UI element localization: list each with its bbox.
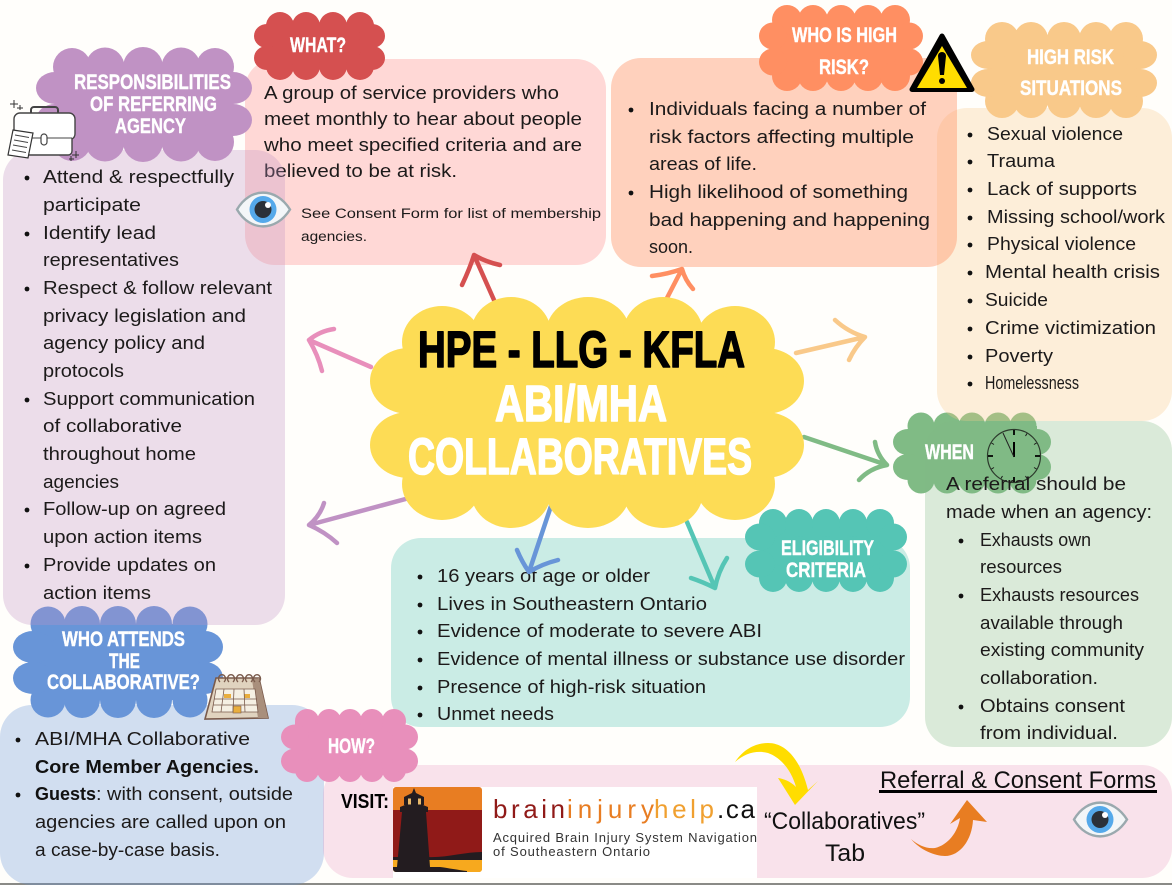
responsibilities list: protocols [43,360,124,381]
who is high risk panel background [611,58,957,267]
high risk situations list: Sexual violence [987,123,1123,144]
who is high risk list: bad happening and happening [649,209,930,230]
eligibility list [418,565,905,724]
high risk situations list [968,123,1166,393]
collaboratives tab label [764,808,925,867]
icon: eye near what panel [237,193,290,226]
when text: existing community [980,639,1145,660]
responsibilities list: action items [43,582,151,603]
heading text: who is high risk [792,24,897,79]
what description: A group of service providers who [264,82,559,103]
responsibilities list: Provide updates on [43,554,216,575]
heading text: eligibility criteria: ELIGIBILITY [781,537,874,560]
high risk situations list: Missing school/work [987,206,1166,227]
consent form note: agencies. [301,229,367,244]
when text: Exhausts resources [980,584,1139,605]
arrow: what [462,255,500,300]
heading text: who attends the collaborative [47,628,200,694]
collaboratives tab label: “Collaboratives” [764,808,925,835]
when panel background [925,421,1172,747]
panel: high risk situations [937,22,1172,421]
who is high risk list: areas of life. [649,153,757,174]
when text: from individual. [980,722,1118,743]
high risk situations list: Suicide [985,289,1048,310]
brain injury help logo: .ca [717,794,756,824]
orange curved arrow [911,800,987,856]
heading text: responsibilities [74,71,231,138]
eligibility list: Lives in Southeastern Ontario [437,593,707,614]
heading text: who attends the collaborative: THE [109,650,140,673]
heading text: who attends the collaborative: COLLABORATIVE? [47,671,200,694]
who attends bullet text: agencies are called upon on [35,811,286,832]
heading cloud: when [893,412,1051,494]
heading text: what: WHAT? [290,34,346,57]
who is high risk list: risk factors affecting multiple [649,126,914,147]
who attends bullet text: a case-by-case basis. [35,839,220,860]
responsibilities list: participate [43,194,141,215]
arrow: high risk situations [796,320,865,360]
icon: warning triangle [912,36,972,90]
brain injury help logo: Acquired Brain Injury System Navigation [493,830,757,845]
eligibility list: Evidence of mental illness or substance use disorder [437,648,905,669]
who is high risk list [629,98,930,257]
eligibility list: Unmet needs [437,703,554,724]
heading text: high risk situations: SITUATIONS [1020,77,1122,100]
referral and consent forms link: Referral & Consent Forms [880,767,1156,794]
panel: who is high risk [611,5,972,267]
who attends bullet text: Core Member Agencies. [35,756,259,777]
what description: meet monthly to hear about people [264,108,582,129]
brain injury help logo [393,787,757,878]
responsibilities list: Identify lead [43,222,156,243]
heading cloud: who attends [13,606,223,718]
when text: Exhausts own [980,529,1091,550]
arrow: who is high risk [652,269,693,298]
title: ABI/MHA: ABI/MHA [495,375,667,432]
icon: eye near referral forms [1074,803,1127,836]
what description: believed to be at risk. [264,160,457,181]
heading text: responsibilities: OF REFERRING [90,93,217,116]
high risk situations list: Poverty [985,345,1054,366]
panel: what [245,12,606,265]
responsibilities list: Respect & follow relevant [43,277,272,298]
central cloud shape [370,297,804,528]
visit label: VISIT: [341,791,389,813]
arrow: who attends [517,503,558,572]
eligibility list: 16 years of age or older [437,565,650,586]
responsibilities list: agencies [43,471,119,492]
heading text: responsibilities: AGENCY [115,115,186,138]
who attends panel background [0,705,324,885]
high risk situations list: Lack of supports [987,178,1137,199]
heading cloud: responsibilities [36,47,252,162]
arrow: how [309,329,371,371]
who is high risk list: soon. [649,236,693,257]
heading text: how: HOW? [328,735,375,758]
when text: collaboration. [980,667,1098,688]
consent form note [301,206,601,244]
title: HPE - LLG - KFLA: HPE - LLG - KFLA [418,321,745,378]
heading text: who is high risk: RISK? [819,56,869,79]
responsibilities list: Support communication [43,388,255,409]
high risk situations list: Physical violence [987,233,1136,254]
who attends bullet text: : with consent, outside [96,783,293,804]
icon: briefcase [8,100,79,161]
heading cloud: what [254,12,385,80]
brain injury help logo: injury [567,794,654,824]
responsibilities panel background [3,150,285,625]
high risk situations list: Trauma [987,150,1056,171]
responsibilities list [25,166,272,603]
responsibilities list: upon action items [43,526,202,547]
high risk situations list: Crime victimization [985,317,1156,338]
arrow: when [804,437,887,480]
eligibility list: Presence of high-risk situation [437,676,706,697]
heading text: who attends the collaborative: WHO ATTENDS [62,628,185,651]
eligibility panel background [391,538,910,727]
responsibilities list: Attend & respectfully [43,166,235,187]
how panel background [323,765,1172,878]
heading text: high risk situations: HIGH RISK [1027,46,1114,69]
heading text: when: WHEN [925,441,974,464]
heading text: who is high risk: WHO IS HIGH [792,24,897,47]
heading cloud: high risk situations [971,22,1157,118]
heading cloud: how [281,709,418,782]
brain injury help logo: brain [493,794,565,824]
brain injury help logo: of Southeastern Ontario [493,844,650,859]
who attends bullet text: Guests [35,783,96,804]
heading cloud: who is high risk [759,5,923,91]
who is high risk list: High likelihood of something [649,181,908,202]
brain injury help logo: help [654,794,714,824]
who attends bullet text [16,728,293,860]
heading text: high risk situations [1020,46,1122,100]
panel: responsibilities of referring agency [3,47,285,625]
arrows [309,255,887,588]
eligibility list: Evidence of moderate to severe ABI [437,620,762,641]
when text: A referral should be [946,473,1126,494]
what description: who meet specified criteria and are [263,134,582,155]
collaboratives tab label: Tab [825,840,865,867]
icon: calendar [205,675,268,719]
who attends bullet text: ABI/MHA Collaborative [35,728,250,749]
what description [263,82,582,181]
responsibilities list: representatives [43,249,179,270]
heading text: responsibilities: RESPONSIBILITIES [74,71,231,94]
when text: resources [980,556,1062,577]
what panel background [245,59,606,265]
heading text: eligibility criteria: CRITERIA [786,559,866,582]
high risk situations list: Homelessness [985,372,1079,393]
arrow: eligibility [687,522,727,588]
icon: clock [988,430,1040,482]
responsibilities list: of collaborative [43,415,182,436]
high risk situations panel background [937,108,1172,421]
when text: made when an agency: [946,501,1152,522]
who is high risk list: Individuals facing a number of [649,98,927,119]
panel: how [281,709,1172,878]
panel: eligibility criteria [391,509,910,727]
heading cloud: eligibility [745,509,907,592]
panel: who attends the collaborative [0,606,324,885]
responsibilities list: Follow-up on agreed [43,498,226,519]
when text [946,473,1152,743]
consent form note: See Consent Form for list of membership [301,206,601,221]
title: collaboratives: COLLABORATIVES [408,428,752,485]
arrow: responsibilities [309,497,413,543]
yellow curved arrow [735,743,818,805]
when text: Obtains consent [980,695,1125,716]
when text: available through [980,612,1123,633]
responsibilities list: agency policy and [43,332,205,353]
responsibilities list: throughout home [43,443,196,464]
heading text: eligibility criteria [781,537,874,582]
central cloud [370,297,804,528]
panel: when [893,412,1172,747]
high risk situations list: Mental health crisis [985,261,1160,282]
responsibilities list: privacy legislation and [43,305,246,326]
